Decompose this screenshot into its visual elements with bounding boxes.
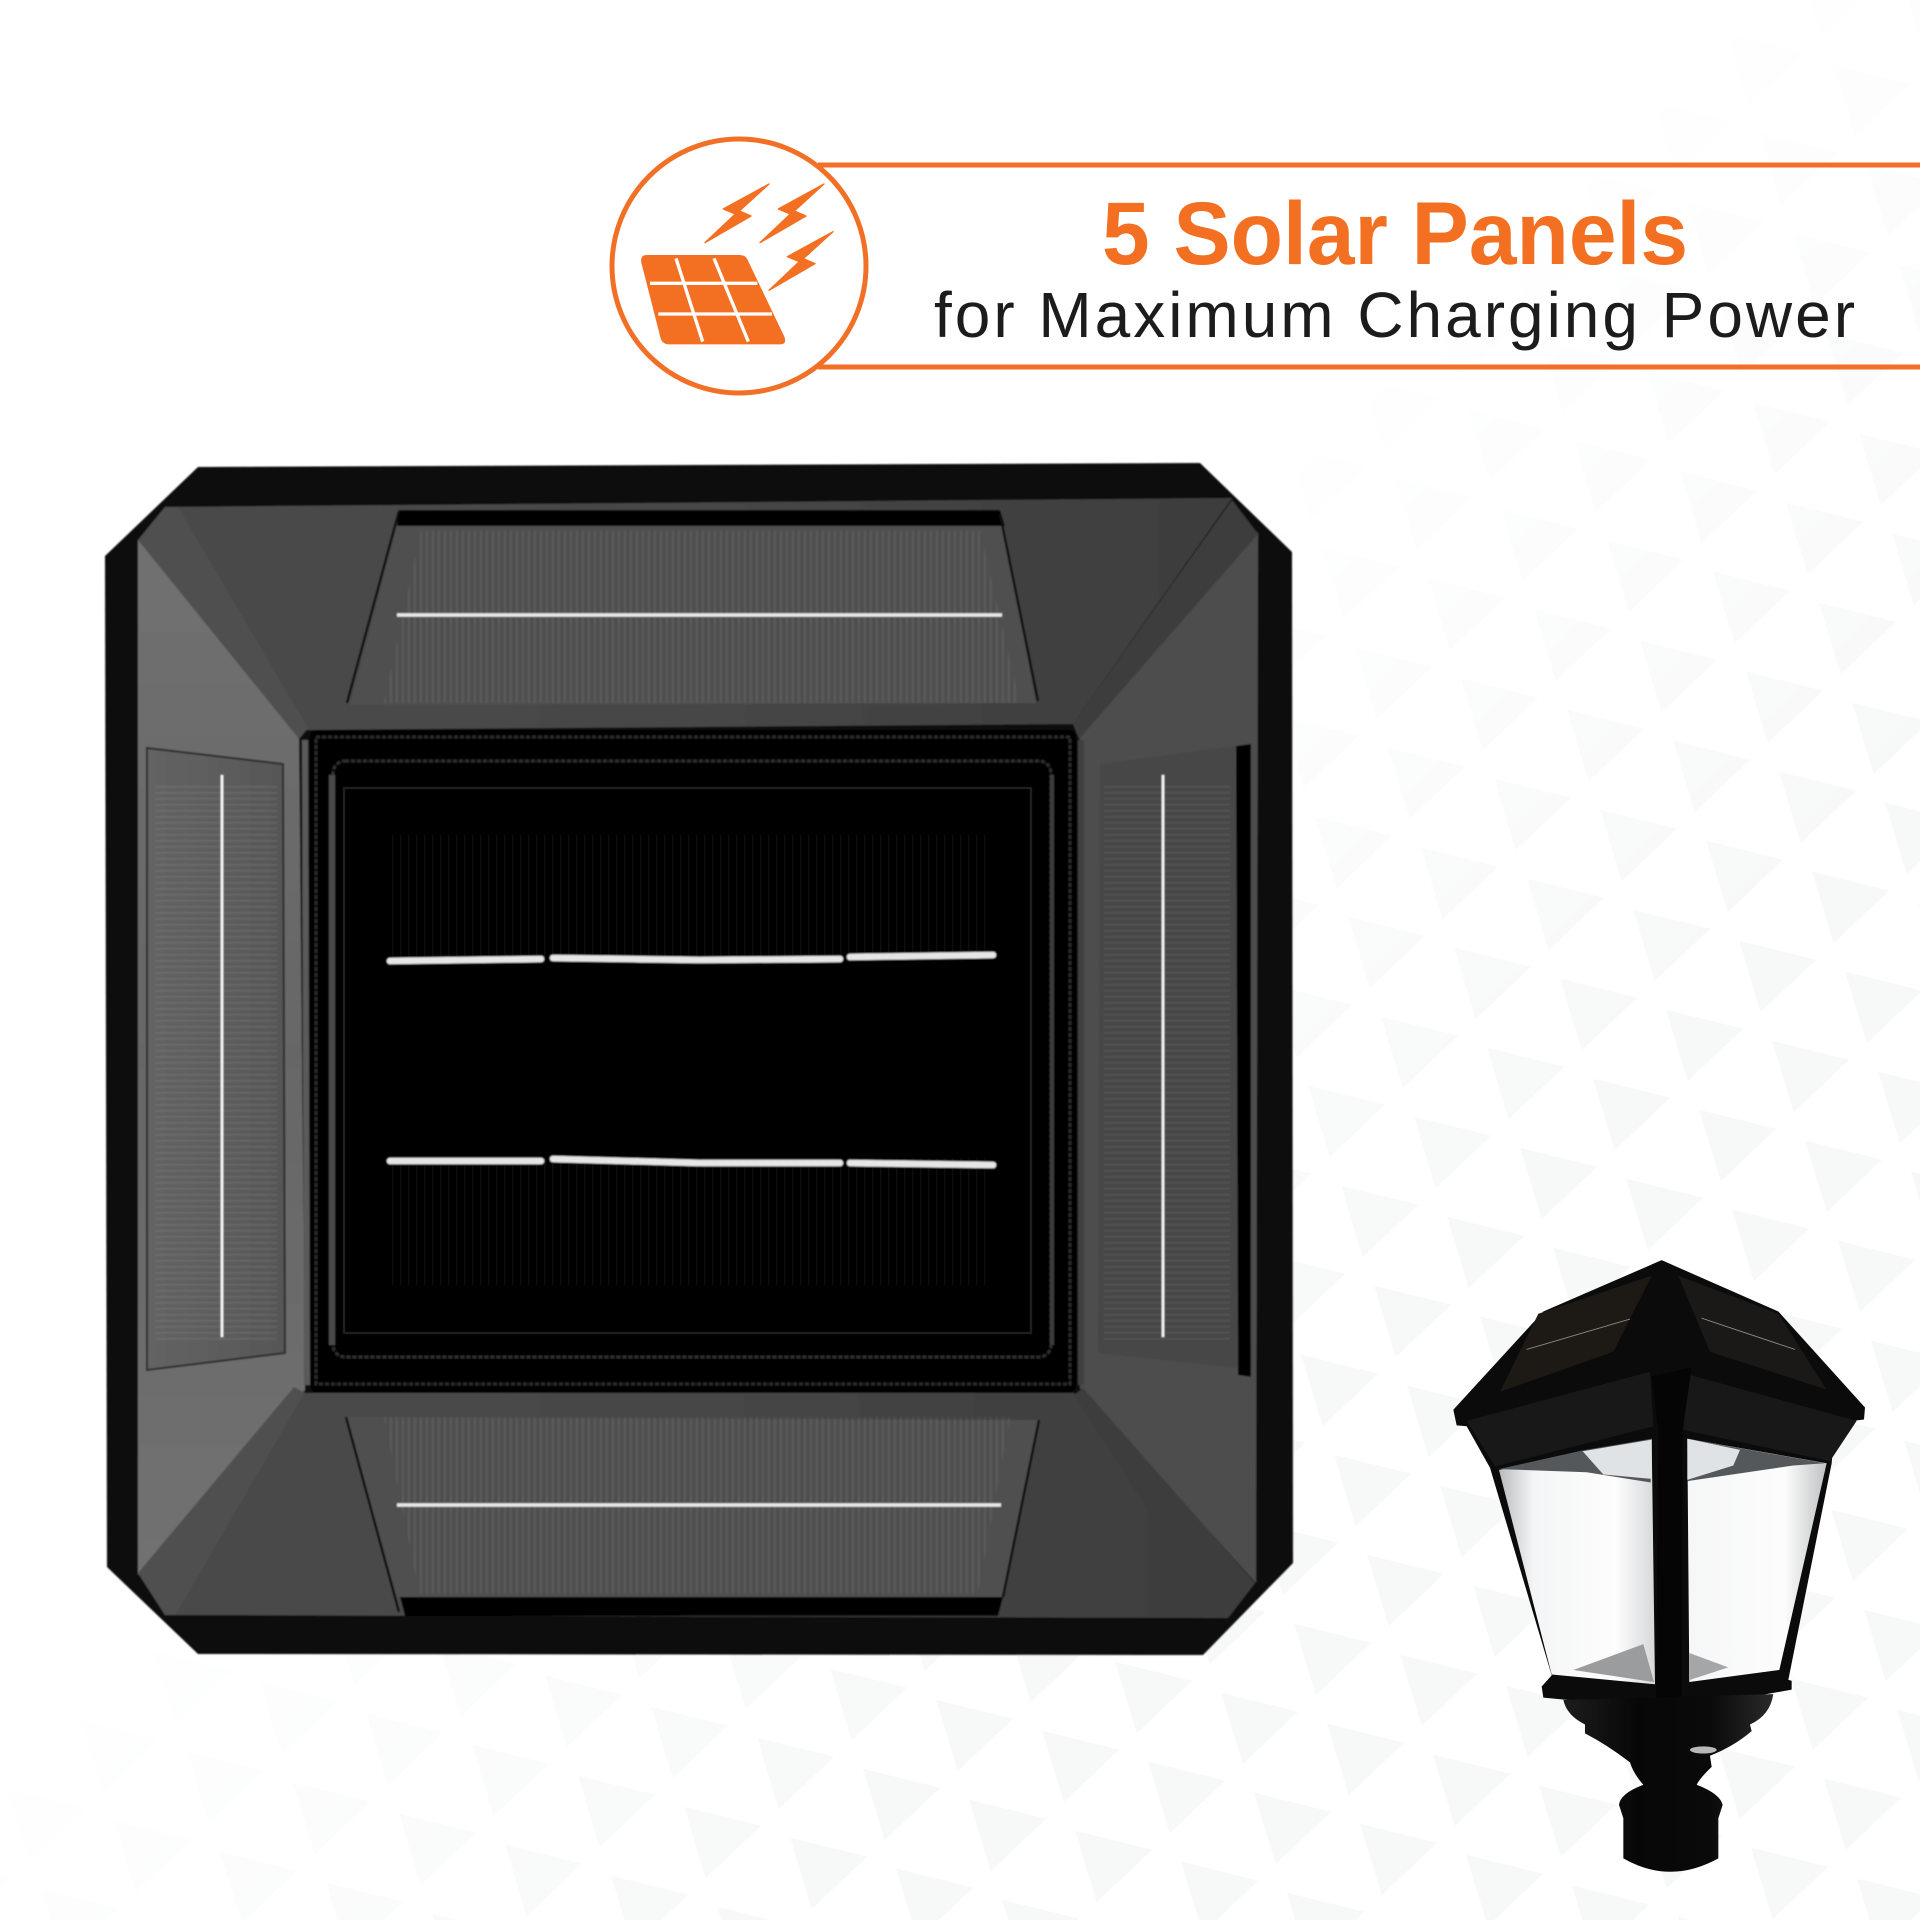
subheading: for Maximum Charging Power [934,279,1855,351]
lamp center post [1652,1367,1692,1699]
left solar panel [147,748,285,1370]
banner bottom rule [818,364,1920,370]
lamp base [1563,1694,1773,1872]
lamp motion sensor [1690,1746,1717,1753]
center solar panel [344,788,1031,1333]
housing bottom facet [176,1393,1220,1618]
center solar panel frame [305,730,1081,1392]
heading: 5 Solar Panels [1102,183,1688,283]
lamp left roof solar panel [1500,1276,1652,1392]
outer black body [105,463,1293,1655]
corner ridges [138,500,1258,1618]
banner top rule [818,162,1920,168]
top solar panel [347,510,1038,705]
icon: solar panel with lightning bolts in a circle [612,139,866,393]
lamp frieze band [1467,1372,1857,1466]
lamp right roof solar panel [1678,1276,1827,1390]
right solar panel [1098,744,1251,1377]
housing left face [138,540,305,1575]
housing top facet [170,498,1232,730]
lamp right glass [1687,1439,1827,1682]
lamp left glass [1499,1439,1655,1684]
bottom solar panel [346,1417,1039,1616]
housing right face [1080,532,1258,1583]
product: solar post lamp [1453,1260,1865,1872]
header banner [612,139,1920,393]
lamp lantern silhouette [1453,1260,1865,1710]
product: solar cap top view [105,463,1293,1655]
